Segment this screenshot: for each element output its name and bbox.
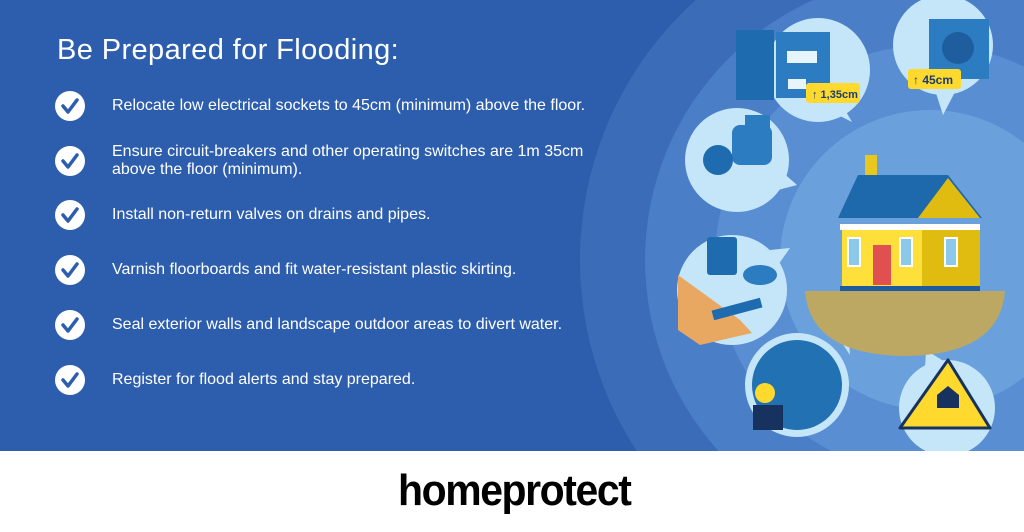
list item 1	[55, 91, 585, 121]
house	[838, 155, 982, 291]
ground	[805, 291, 1005, 356]
bubble: pump	[685, 108, 797, 212]
footer logo: homeprotect	[398, 466, 630, 515]
list item 6: Register for flood alerts and stay prepared.	[112, 371, 415, 388]
list item 2	[55, 143, 583, 178]
check marks	[61, 98, 79, 388]
list item 4	[55, 255, 516, 285]
list item 1: Relocate low electrical sockets to 45cm (minimum) above the floor.	[112, 97, 585, 114]
bubble: socket	[893, 0, 993, 115]
bubble: electrical panel	[736, 18, 870, 122]
list item 2: Ensure circuit-breakers and other operating switches are 1m 35cm	[112, 143, 583, 160]
list item 5	[55, 310, 562, 340]
list item 3: Install non-return valves on drains and pipes.	[112, 206, 430, 223]
list item 4: Varnish floorboards and fit water-resistant plastic skirting.	[112, 261, 516, 278]
bubble: socket: ↑ 45cm	[913, 73, 953, 87]
list item 3	[55, 200, 430, 230]
bubble: worker sealing wall	[745, 330, 850, 437]
list item 6	[55, 365, 415, 395]
list item 2: above the floor (minimum).	[112, 161, 302, 178]
bubble: varnish	[677, 235, 790, 345]
bubble: flood warning	[899, 350, 995, 456]
title: Be Prepared for Flooding:	[57, 34, 399, 66]
bubble: electrical panel: ↑ 1,35cm	[812, 89, 858, 101]
list item 5: Seal exterior walls and landscape outdoor areas to divert water.	[112, 316, 562, 333]
